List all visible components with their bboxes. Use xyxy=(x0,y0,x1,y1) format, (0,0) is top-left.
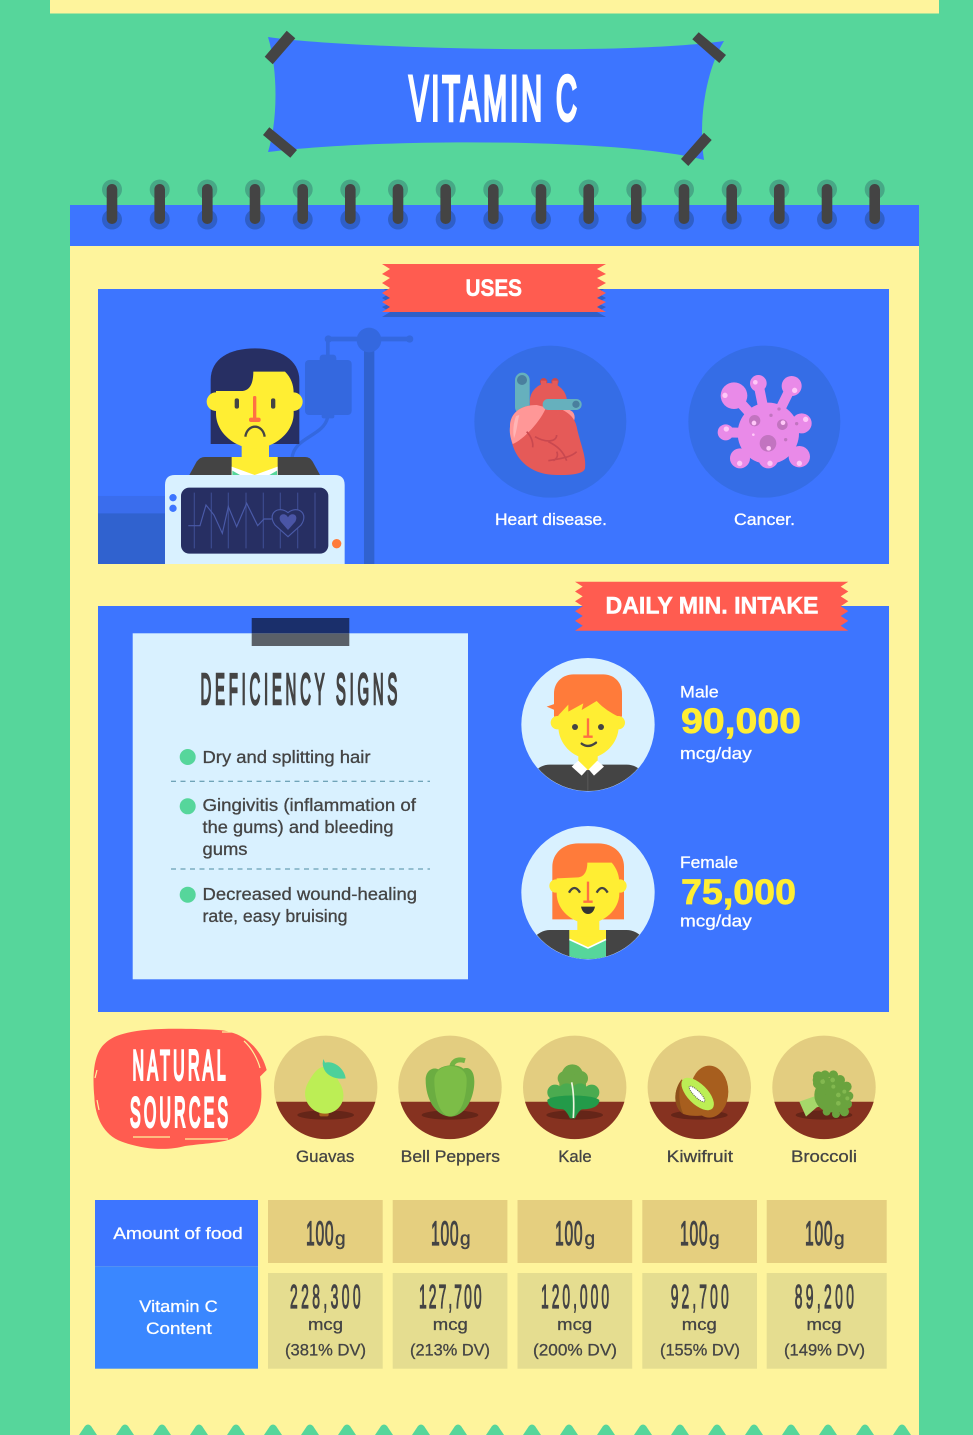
text: male intake: Male xyxy=(680,683,719,702)
list of signs: Dry and splitting hair xyxy=(202,747,371,767)
table row: vitamin c content cells: 92,700 xyxy=(671,1279,729,1316)
table row: vitamin c content cells: 127,700 xyxy=(419,1279,482,1316)
food: kiwifruit: Kiwifruit xyxy=(667,1147,733,1166)
text: female intake: Female xyxy=(680,853,738,872)
title: VITAMIN C xyxy=(409,65,577,134)
food: kale: Kale xyxy=(558,1147,592,1166)
table row: vitamin c content cells: (149% DV) xyxy=(784,1341,865,1360)
list of signs: gums xyxy=(202,839,248,859)
table row header: vitamin c content: Vitamin C xyxy=(139,1297,218,1316)
table row: vitamin c content cells xyxy=(268,1273,887,1369)
text: male intake: 90,000 xyxy=(681,702,801,741)
panel: daily min. intake xyxy=(98,606,889,1012)
panel: uses xyxy=(98,289,889,564)
notebook header band xyxy=(70,205,919,246)
table row header: amount of food: Amount of food xyxy=(113,1224,243,1243)
food: kale xyxy=(523,1036,626,1166)
list of signs: Decreased wound-healing xyxy=(202,884,417,904)
table row header: amount of food xyxy=(95,1200,258,1266)
icon: heart disease xyxy=(474,346,626,498)
ribbon: uses xyxy=(382,264,606,317)
table row: vitamin c content cells: (381% DV) xyxy=(285,1341,366,1360)
table row: amount cells: g xyxy=(709,1229,720,1250)
text: female intake xyxy=(680,853,796,931)
table row: amount cells: 100 xyxy=(306,1214,334,1253)
table row: vitamin c content cells: 89,200 xyxy=(795,1279,854,1316)
table row: vitamin c content cells: mcg xyxy=(433,1315,468,1334)
heading: deficiency signs: DEFICIENCY SIGNS xyxy=(200,664,397,713)
table row: vitamin c content cells: 120,000 xyxy=(541,1279,609,1316)
list of signs: Gingivitis (inflammation of xyxy=(202,795,416,815)
top paper strip xyxy=(50,0,939,14)
notebook paper xyxy=(70,246,919,1435)
badge: natural sources: NATURAL xyxy=(132,1041,226,1089)
table row: vitamin c content cells: (200% DV) xyxy=(533,1341,617,1360)
table row: vitamin c content cells: (213% DV) xyxy=(410,1341,490,1360)
table row: amount cells: g xyxy=(335,1229,346,1250)
table row: amount cells: 100 xyxy=(680,1214,708,1253)
text: male intake: mcg/day xyxy=(680,744,752,763)
list of signs: rate, easy bruising xyxy=(202,906,348,926)
food: guavas xyxy=(274,1036,377,1166)
food: broccoli: Broccoli xyxy=(791,1147,857,1166)
badge: natural sources: SOURCES xyxy=(130,1088,228,1136)
food: kiwifruit xyxy=(648,1036,751,1166)
ribbon: uses: USES xyxy=(466,275,522,302)
list of signs xyxy=(171,747,430,926)
title banner xyxy=(263,31,726,166)
spiral rings xyxy=(102,180,885,230)
table row: amount cells: 100 xyxy=(431,1214,459,1253)
tape corners xyxy=(263,31,726,166)
table row: vitamin c content cells: mcg xyxy=(308,1315,343,1334)
ribbon: daily min. intake: DAILY MIN. INTAKE xyxy=(606,593,818,620)
icon: cancer cell xyxy=(688,346,840,498)
table row: vitamin c content cells: 228,300 xyxy=(290,1279,361,1316)
table row: vitamin c content cells: (155% DV) xyxy=(660,1341,740,1360)
table row header: vitamin c content: Content xyxy=(146,1319,212,1338)
ribbon: daily min. intake xyxy=(575,582,848,631)
label: heart disease: Heart disease. xyxy=(495,510,607,529)
avatar: male xyxy=(521,658,655,797)
table row: vitamin c content cells: mcg xyxy=(806,1315,842,1334)
table row: amount cells: g xyxy=(834,1229,845,1250)
text: female intake: 75,000 xyxy=(681,873,796,912)
table row: vitamin c content cells: mcg xyxy=(557,1315,592,1334)
food: bell peppers xyxy=(398,1036,502,1166)
label: cancer: Cancer. xyxy=(734,510,795,529)
avatar: female xyxy=(521,826,655,963)
table row: amount cells: 100 xyxy=(805,1214,833,1253)
food: guavas: Guavas xyxy=(296,1147,354,1166)
text: male intake xyxy=(680,683,801,763)
text: female intake: mcg/day xyxy=(680,912,752,931)
table row header: vitamin c content xyxy=(95,1266,258,1369)
table row: amount cells: g xyxy=(460,1229,471,1250)
badge: natural sources xyxy=(94,1029,267,1149)
list of signs: the gums) and bleeding xyxy=(202,817,394,837)
bottom zigzag edge xyxy=(79,1424,911,1435)
table row: amount cells: 100 xyxy=(555,1214,583,1253)
food: broccoli xyxy=(772,1036,876,1166)
table row: vitamin c content cells: mcg xyxy=(682,1315,717,1334)
illustration: patient with heart monitor xyxy=(98,328,413,564)
table row: amount cells xyxy=(268,1200,887,1263)
table row: amount cells: g xyxy=(584,1229,595,1250)
note card: deficiency signs xyxy=(133,618,468,979)
food: bell peppers: Bell Peppers xyxy=(401,1147,500,1166)
